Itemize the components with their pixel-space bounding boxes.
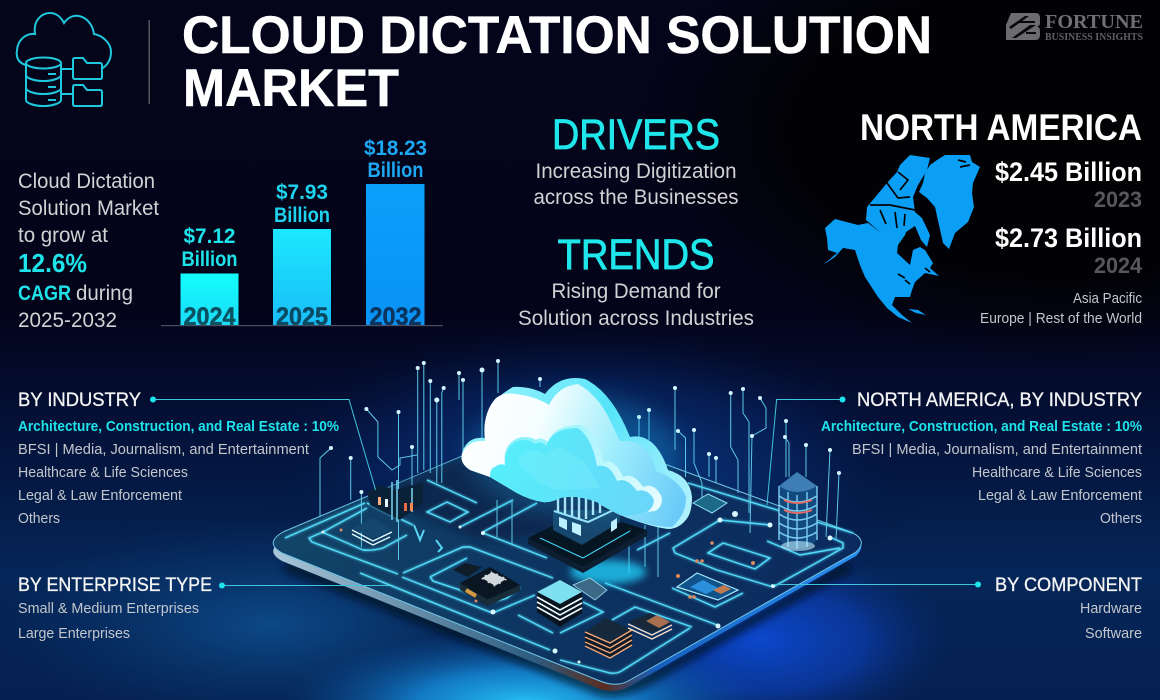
value 2023 [995, 157, 1142, 212]
segment list: Others [18, 511, 60, 527]
chip: right panel [677, 573, 738, 600]
title: CLOUD DICTATION SOLUTION [182, 6, 932, 65]
CAGR text block: to grow at [18, 224, 108, 247]
segment list [18, 601, 199, 642]
heading: BY ENTERPRISE TYPE [18, 575, 212, 596]
segment list: Software [1085, 626, 1142, 642]
callout line: by component [773, 582, 981, 588]
server stack white [537, 580, 582, 627]
bar 2032: Billion [368, 159, 424, 182]
other regions: Europe | Rest of the World [980, 311, 1142, 327]
value 2024 [995, 223, 1143, 278]
platform top [273, 422, 861, 684]
segment list [18, 442, 309, 527]
map: North America [823, 155, 980, 323]
cloud halo [470, 395, 680, 515]
segment list: Legal & Law Enforcement [18, 488, 182, 504]
CAGR text block: Cloud Dictation [18, 170, 155, 193]
central building [528, 495, 647, 573]
value 2023: 2023 [1094, 187, 1142, 212]
highlighted segment: Architecture, Construction, and Real Estate : 10% [821, 419, 1142, 435]
callout line: north america by industry [767, 396, 846, 505]
value 2024: 2024 [1094, 253, 1143, 278]
segment list: Healthcare & Life Sciences [972, 465, 1142, 481]
bar 2025: $7.93 [276, 181, 328, 204]
bar 2032: $18.23 [364, 137, 427, 160]
segment list: Others [1100, 511, 1142, 527]
panel: by enterprise type [18, 575, 212, 642]
cloud [462, 378, 692, 529]
trends: TRENDS [558, 231, 714, 279]
other regions [980, 291, 1142, 327]
heading: NORTH AMERICA, BY INDUSTRY [857, 390, 1142, 411]
segment list [852, 442, 1142, 527]
segment list: Hardware [1080, 601, 1142, 617]
value 2024: $2.73 Billion [995, 223, 1142, 253]
right small device [693, 494, 727, 513]
tower [779, 472, 817, 551]
cloud extruded body [462, 378, 692, 529]
segment list [1080, 601, 1142, 642]
segment list: Healthcare & Life Sciences [18, 465, 188, 481]
CAGR text block: 12.6% [18, 248, 87, 278]
cloud front extrusion [490, 425, 662, 516]
bar 2024: $7.12 [184, 225, 236, 248]
pin dots [329, 359, 841, 494]
circuit traces [285, 480, 853, 673]
segment list: BFSI | Media, Journalism, and Entertainment [18, 442, 309, 458]
circuit nodes [322, 511, 832, 664]
pins [320, 361, 839, 577]
trends [518, 231, 754, 330]
server stack small [628, 613, 672, 639]
CAGR text block: CAGR [18, 282, 71, 305]
trends: Solution across Industries [518, 307, 754, 330]
server stack orange [585, 618, 632, 658]
bar 2025 [273, 181, 331, 331]
logo: Fortune Business Insights: FORTUNE [1045, 11, 1143, 33]
drivers: DRIVERS [552, 111, 720, 159]
CAGR text block: Solution Market [18, 197, 159, 220]
cloud inner highlight [518, 446, 600, 490]
bar 2024: 2024 [184, 303, 236, 331]
callout line: by enterprise type [219, 582, 390, 588]
other regions: Asia Pacific [1073, 291, 1142, 307]
bar 2024: Billion [182, 248, 238, 271]
drivers [534, 111, 738, 209]
small server device [573, 578, 607, 600]
bar 2032: 2032 [370, 303, 422, 331]
segment list: Legal & Law Enforcement [978, 488, 1142, 504]
segment list: Small & Medium Enterprises [18, 601, 199, 617]
value 2023: $2.45 Billion [995, 157, 1142, 187]
bar 2025: 2025 [276, 303, 328, 331]
illustration: cloud over circuit platform [273, 359, 861, 691]
CAGR text block [18, 170, 159, 332]
drivers: across the Businesses [534, 186, 738, 209]
title [182, 6, 932, 118]
CAGR text block: during [76, 282, 133, 305]
bar 2024 [180, 225, 238, 331]
left chip stack [352, 518, 392, 545]
dark device [453, 563, 520, 606]
logo: Fortune Business Insights: BUSINESS INSIGHTS [1045, 32, 1143, 43]
CAGR text block: 2025-2032 [18, 309, 117, 332]
heading: BY COMPONENT [995, 575, 1142, 596]
left buildings [367, 480, 442, 552]
title: MARKET [183, 59, 399, 118]
platform side [273, 430, 861, 691]
logo: Fortune Business Insights [1006, 11, 1143, 43]
divider [148, 20, 150, 104]
small components [340, 528, 755, 602]
building plate glow [570, 560, 646, 584]
drivers: Increasing Digitization [536, 160, 736, 183]
segment list: BFSI | Media, Journalism, and Entertainment [852, 442, 1142, 458]
cloud front face [490, 428, 654, 516]
segment list: Large Enterprises [18, 626, 130, 642]
back-side darkening [370, 428, 700, 540]
bar chart [161, 137, 443, 331]
bar 2032 [364, 137, 427, 331]
heading: BY INDUSTRY [18, 390, 141, 411]
icon: cloud database with folders [17, 13, 111, 106]
panel: by industry [18, 390, 339, 527]
North America panel [823, 107, 1143, 327]
cloud back face [462, 384, 686, 527]
panel: by component [995, 575, 1142, 642]
panel: north america by industry [821, 390, 1142, 527]
trends: Rising Demand for [552, 280, 721, 303]
callout line: by industry [150, 396, 376, 490]
bar 2025: Billion [274, 204, 330, 227]
platform shadow [285, 566, 850, 691]
highlighted segment: Architecture, Construction, and Real Estate : 10% [18, 419, 339, 435]
